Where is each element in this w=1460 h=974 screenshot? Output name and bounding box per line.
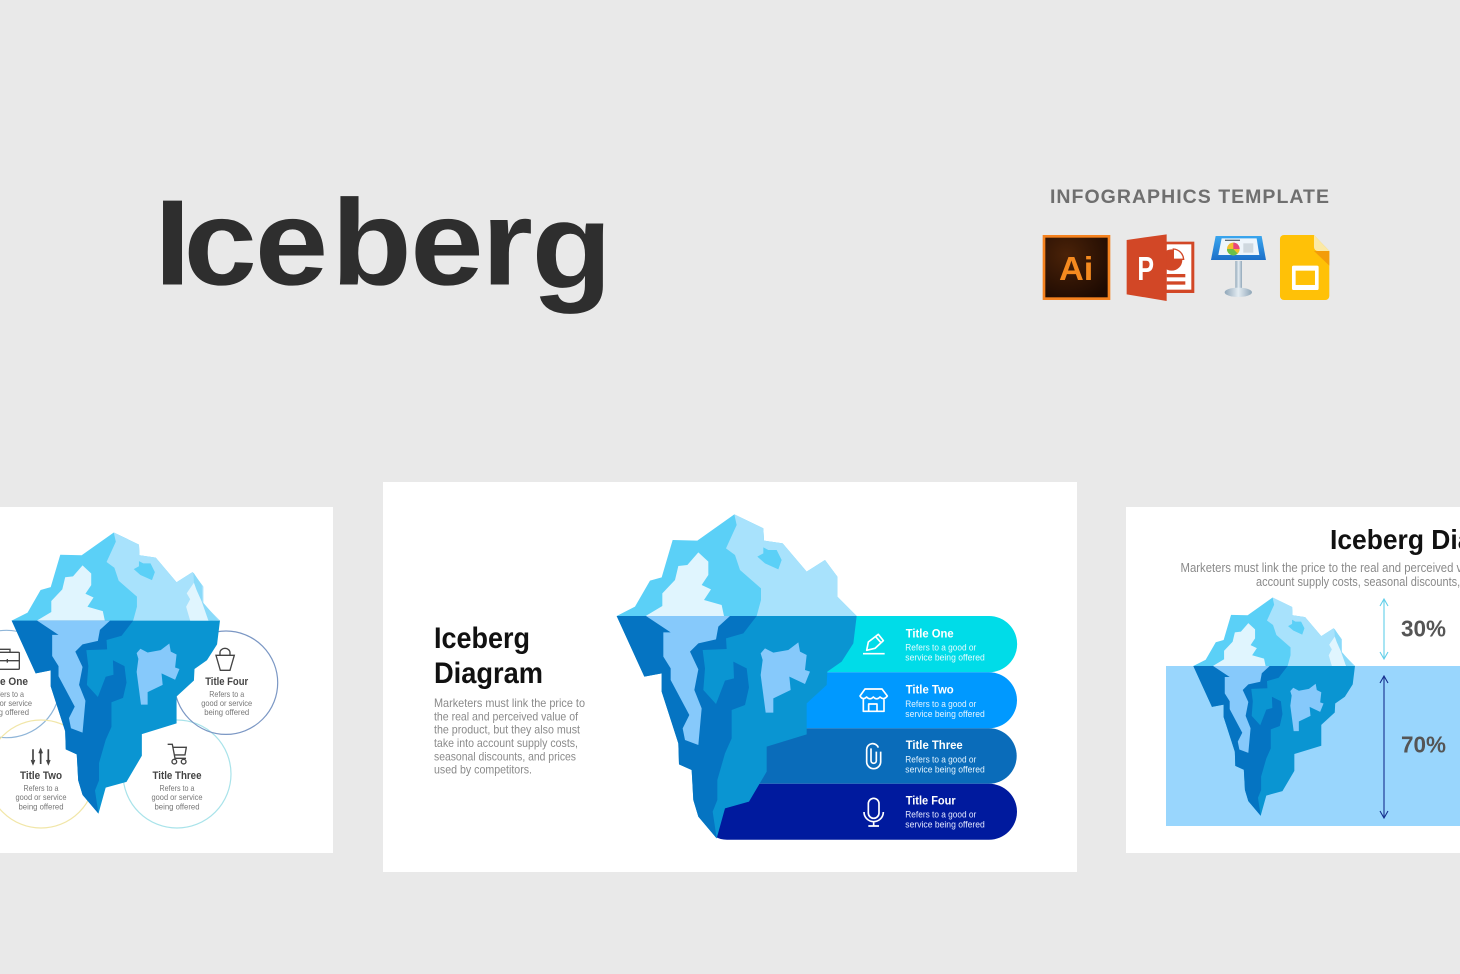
text: bar three: [905, 738, 985, 774]
bar: title one: [820, 616, 1017, 672]
water area: [1166, 666, 1460, 826]
text: bar three: Title Three: [906, 738, 963, 752]
text: title four: [201, 676, 252, 717]
text: title one: [0, 676, 32, 717]
iceberg: centre: [617, 514, 857, 838]
text: title two: Refers to a: [24, 783, 59, 793]
text: bar one: [905, 627, 985, 663]
text: bar one: Refers to a good or: [905, 643, 976, 653]
icon: shopping cart: [168, 744, 186, 764]
text: bar three: Refers to a good or: [905, 754, 976, 764]
icons: bars: [860, 634, 887, 826]
text block: description: the product, but they also must: [434, 723, 581, 737]
icon: Google Slides: [1280, 235, 1329, 300]
text: bar four: Refers to a good or: [905, 810, 976, 820]
text: title four: good or service: [201, 698, 252, 708]
icon: PowerPoint: P: [1137, 251, 1154, 288]
icon: Illustrator: [1044, 236, 1109, 299]
panel: right slide, 30/70 split: [1126, 507, 1460, 853]
circle: title four: [174, 631, 278, 734]
text: title two: being offered: [18, 802, 64, 812]
icon: PowerPoint: [1127, 234, 1194, 301]
icon: Keynote: [1211, 236, 1266, 297]
heading: iceberg diagram: Diagram: [434, 657, 543, 690]
text: bar four: [905, 794, 985, 830]
text: title two: Title Two: [20, 770, 62, 782]
circle: title one: [0, 630, 60, 738]
icon: bucket: [216, 648, 234, 670]
icon: briefcase: [0, 649, 19, 669]
icons: left slide: [0, 648, 234, 764]
bar: title four: [716, 784, 1017, 840]
text: title three: Title Three: [152, 770, 202, 782]
icon: paper clip: [867, 744, 881, 769]
text: bar one: service being offered: [905, 653, 985, 663]
text block: description: the real and perceived value of: [434, 709, 579, 723]
icon: Illustrator: Ai: [1059, 251, 1093, 288]
text: title three: Refers to a: [160, 783, 195, 793]
icon: store: [860, 689, 887, 711]
label: 70 percent: 70%: [1401, 732, 1446, 758]
bar: title two: [790, 672, 1017, 728]
text: title two: good or service: [16, 792, 67, 802]
text: bar one: Title One: [906, 627, 954, 641]
text: title two: [16, 770, 67, 812]
text: bar two: Title Two: [906, 683, 954, 697]
text: bar two: service being offered: [905, 709, 985, 719]
text: bar two: [905, 683, 985, 719]
bar: title three: [750, 728, 1017, 784]
text: bar four: Title Four: [906, 794, 956, 808]
text block: description: take into account supply costs,: [434, 736, 578, 750]
icon: microphone: [864, 798, 883, 826]
circle: title two: [0, 720, 95, 828]
heading: iceberg diagram: Iceberg: [434, 622, 530, 655]
text block: description: [1180, 561, 1460, 589]
text: bar two: Refers to a good or: [905, 699, 976, 709]
text: title three: being offered: [154, 802, 200, 812]
subtitle: infographics template: INFOGRAPHICS TEMPLATE: [1050, 186, 1329, 208]
iceberg: right: [1193, 598, 1355, 816]
label: 30 percent: 30%: [1401, 616, 1446, 642]
text block: description: [434, 696, 585, 777]
icon: pencil: [863, 634, 885, 654]
text: title three: good or service: [152, 792, 203, 802]
heading: iceberg diagram: [434, 622, 543, 690]
text: title three: [152, 770, 203, 812]
iceberg: left: [12, 532, 220, 814]
arrow: 70 percent: [1380, 676, 1388, 818]
text: title four: Title Four: [205, 676, 249, 688]
icon: arrows: [31, 749, 50, 764]
main title: Iceberg: [154, 174, 612, 314]
panel: centre slide: [383, 482, 1077, 872]
text block: description: used by competitors.: [434, 763, 532, 777]
text: title four: Refers to a: [209, 689, 244, 699]
circle: title three: [123, 720, 231, 828]
text block: description: seasonal discounts, and prices: [434, 749, 576, 763]
arrow: 30 percent: [1380, 599, 1388, 659]
text: bar three: service being offered: [905, 764, 985, 774]
text: title four: being offered: [204, 707, 249, 717]
software icons: [1044, 234, 1329, 301]
text block: description: Marketers must link the price to: [434, 696, 585, 710]
panel: left slide, circles: [0, 507, 333, 853]
text: bar four: service being offered: [905, 820, 985, 830]
